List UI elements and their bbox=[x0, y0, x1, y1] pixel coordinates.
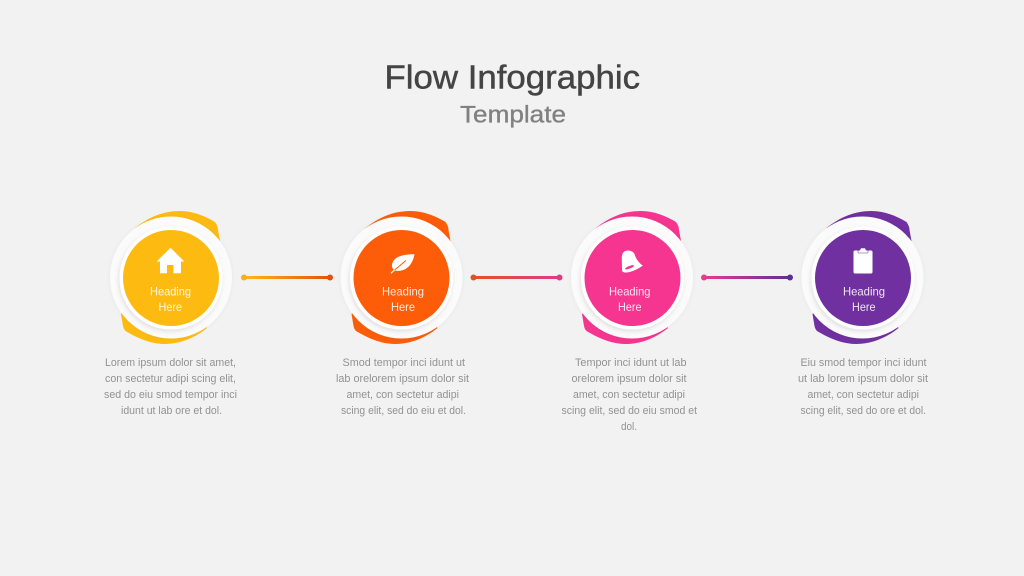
panel: step 2 bbox=[336, 211, 469, 417]
text block: amet, con sectetur adipi bbox=[346, 389, 459, 401]
heading: Heading bbox=[382, 285, 424, 299]
heading bbox=[382, 285, 424, 314]
heading: Here bbox=[158, 300, 182, 314]
heading: Heading bbox=[843, 285, 885, 299]
text block: ut lab lorem ipsum dolor sit bbox=[798, 373, 928, 385]
text block: scing elit, sed do ore et dol. bbox=[800, 405, 926, 417]
outer white ring bbox=[340, 216, 462, 338]
blob: purple bbox=[812, 211, 912, 344]
text block bbox=[562, 357, 697, 433]
text block: lab orelorem ipsum dolor sit bbox=[336, 373, 469, 385]
arrow: connector 2 bbox=[470, 274, 562, 280]
heading bbox=[609, 285, 650, 314]
text block bbox=[336, 357, 469, 417]
orange disc bbox=[354, 230, 450, 326]
title: Flow Infographic bbox=[384, 58, 640, 96]
purple disc bbox=[815, 230, 911, 326]
text block: Lorem ipsum dolor sit amet, bbox=[105, 357, 236, 369]
text block: Tempor inci idunt ut lab bbox=[575, 357, 686, 369]
inner white ring bbox=[812, 226, 914, 330]
panel: step 3 bbox=[562, 211, 697, 433]
inner white ring bbox=[120, 226, 222, 330]
outer white ring bbox=[571, 216, 693, 338]
subtitle: Template bbox=[460, 102, 566, 128]
text block: dol. bbox=[621, 421, 637, 433]
text block: idunt ut lab ore et dol. bbox=[121, 405, 222, 417]
blob: yellow bbox=[121, 211, 220, 344]
pink disc bbox=[584, 230, 680, 326]
panel: step 4 bbox=[798, 211, 928, 417]
outer white ring bbox=[802, 216, 924, 338]
text block: scing elit, sed do eiu smod et bbox=[562, 405, 697, 417]
heading: Heading bbox=[150, 285, 191, 299]
text block: Smod tempor inci idunt ut bbox=[342, 357, 465, 369]
text block: con sectetur adipi scing elit, bbox=[105, 373, 236, 385]
outer white ring bbox=[110, 216, 232, 338]
text block bbox=[104, 357, 237, 417]
heading bbox=[843, 285, 885, 314]
icon: clipboard bbox=[854, 248, 872, 274]
text block: orelorem ipsum dolor sit bbox=[572, 373, 686, 385]
panel: step 1 bbox=[104, 211, 237, 417]
text block bbox=[798, 357, 928, 417]
arrow: connector 3 bbox=[701, 274, 793, 280]
text block: amet, con sectetur adipi bbox=[808, 389, 919, 401]
text block: Eiu smod tempor inci idunt bbox=[800, 357, 926, 369]
heading: Here bbox=[618, 300, 642, 314]
blob: pink bbox=[582, 211, 681, 344]
text block: sed do eiu smod tempor inci bbox=[104, 389, 237, 401]
inner white ring bbox=[350, 226, 453, 330]
heading: Here bbox=[852, 300, 876, 314]
heading: Here bbox=[391, 300, 415, 314]
icon: house bbox=[157, 248, 184, 273]
inner white ring bbox=[581, 226, 684, 330]
yellow disc bbox=[123, 230, 219, 326]
icon: leaf bbox=[391, 254, 414, 273]
heading: Heading bbox=[609, 285, 650, 299]
text block: scing elit, sed do eiu et dol. bbox=[341, 405, 466, 417]
arrow: connector 1 bbox=[241, 274, 333, 280]
icon: bell bbox=[622, 250, 643, 273]
heading bbox=[150, 285, 191, 314]
blob: orange bbox=[352, 211, 450, 344]
text block: amet, con sectetur adipi bbox=[573, 389, 685, 401]
